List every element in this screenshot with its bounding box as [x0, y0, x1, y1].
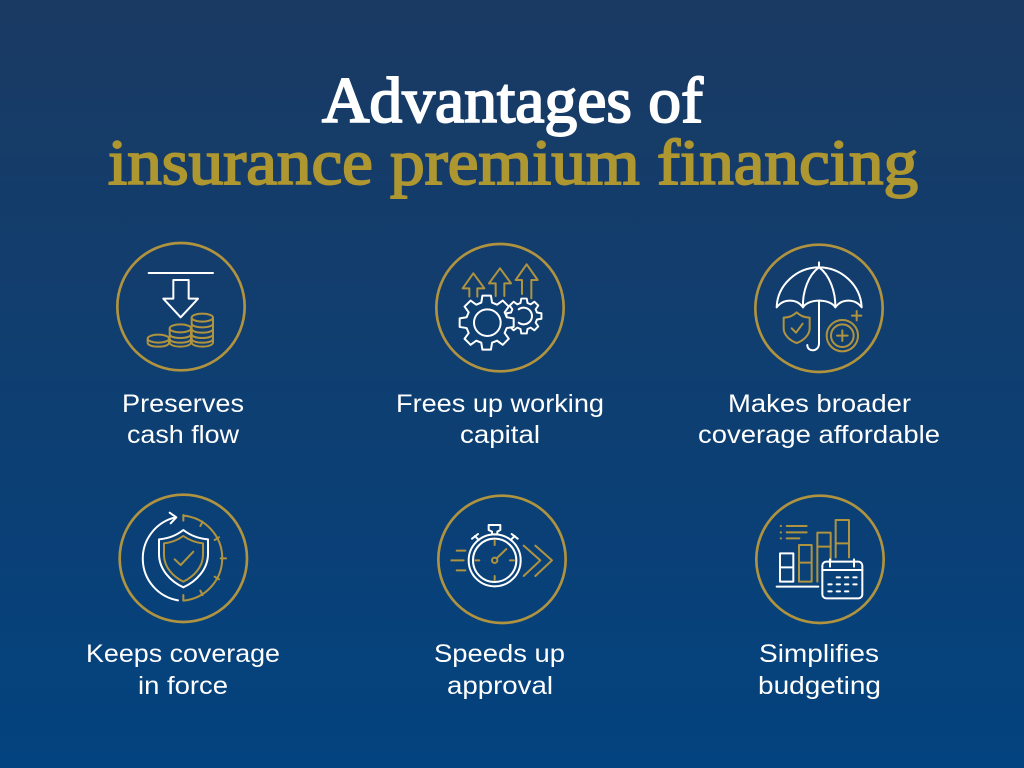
icon: arrow down to coins	[117, 243, 245, 370]
label: makes broader coverage affordable: coverage affordable	[698, 421, 940, 449]
label: preserves cash flow: cash flow	[127, 421, 240, 449]
icon: bar chart and calendar	[756, 496, 884, 623]
label: simplifies budgeting	[758, 640, 881, 700]
panel: frees up working capital	[396, 244, 604, 449]
panel: preserves cash flow	[117, 243, 245, 449]
title	[108, 65, 918, 199]
icon: umbrella with shield and coin	[755, 245, 883, 372]
label: keeps coverage in force: in force	[138, 672, 228, 700]
panel: speeds up approval	[434, 496, 566, 700]
label: keeps coverage in force	[86, 640, 280, 700]
label: speeds up approval: Speeds up	[434, 640, 565, 668]
panel: simplifies budgeting	[756, 496, 884, 700]
label: frees up working capital: capital	[460, 421, 540, 449]
label: preserves cash flow	[122, 390, 244, 449]
label: makes broader coverage affordable: Makes broader	[728, 390, 911, 418]
panel: keeps coverage in force	[86, 495, 280, 700]
label: keeps coverage in force: Keeps coverage	[86, 640, 280, 668]
icon: gears and arrows	[436, 244, 564, 371]
label: speeds up approval	[434, 640, 565, 700]
label: frees up working capital: Frees up working	[396, 390, 604, 418]
panel: makes broader coverage affordable	[698, 245, 940, 449]
label: simplifies budgeting: Simplifies	[759, 640, 879, 668]
label: frees up working capital	[396, 390, 604, 449]
title line 2: insurance premium financing	[108, 127, 918, 199]
title line 1: Advantages of	[322, 65, 703, 137]
label: preserves cash flow: Preserves	[122, 390, 244, 418]
icon: shield with renewal arc	[120, 495, 247, 622]
label: simplifies budgeting: budgeting	[758, 672, 881, 700]
label: makes broader coverage affordable	[698, 390, 940, 449]
icon: stopwatch	[438, 496, 566, 623]
label: speeds up approval: approval	[447, 672, 553, 700]
